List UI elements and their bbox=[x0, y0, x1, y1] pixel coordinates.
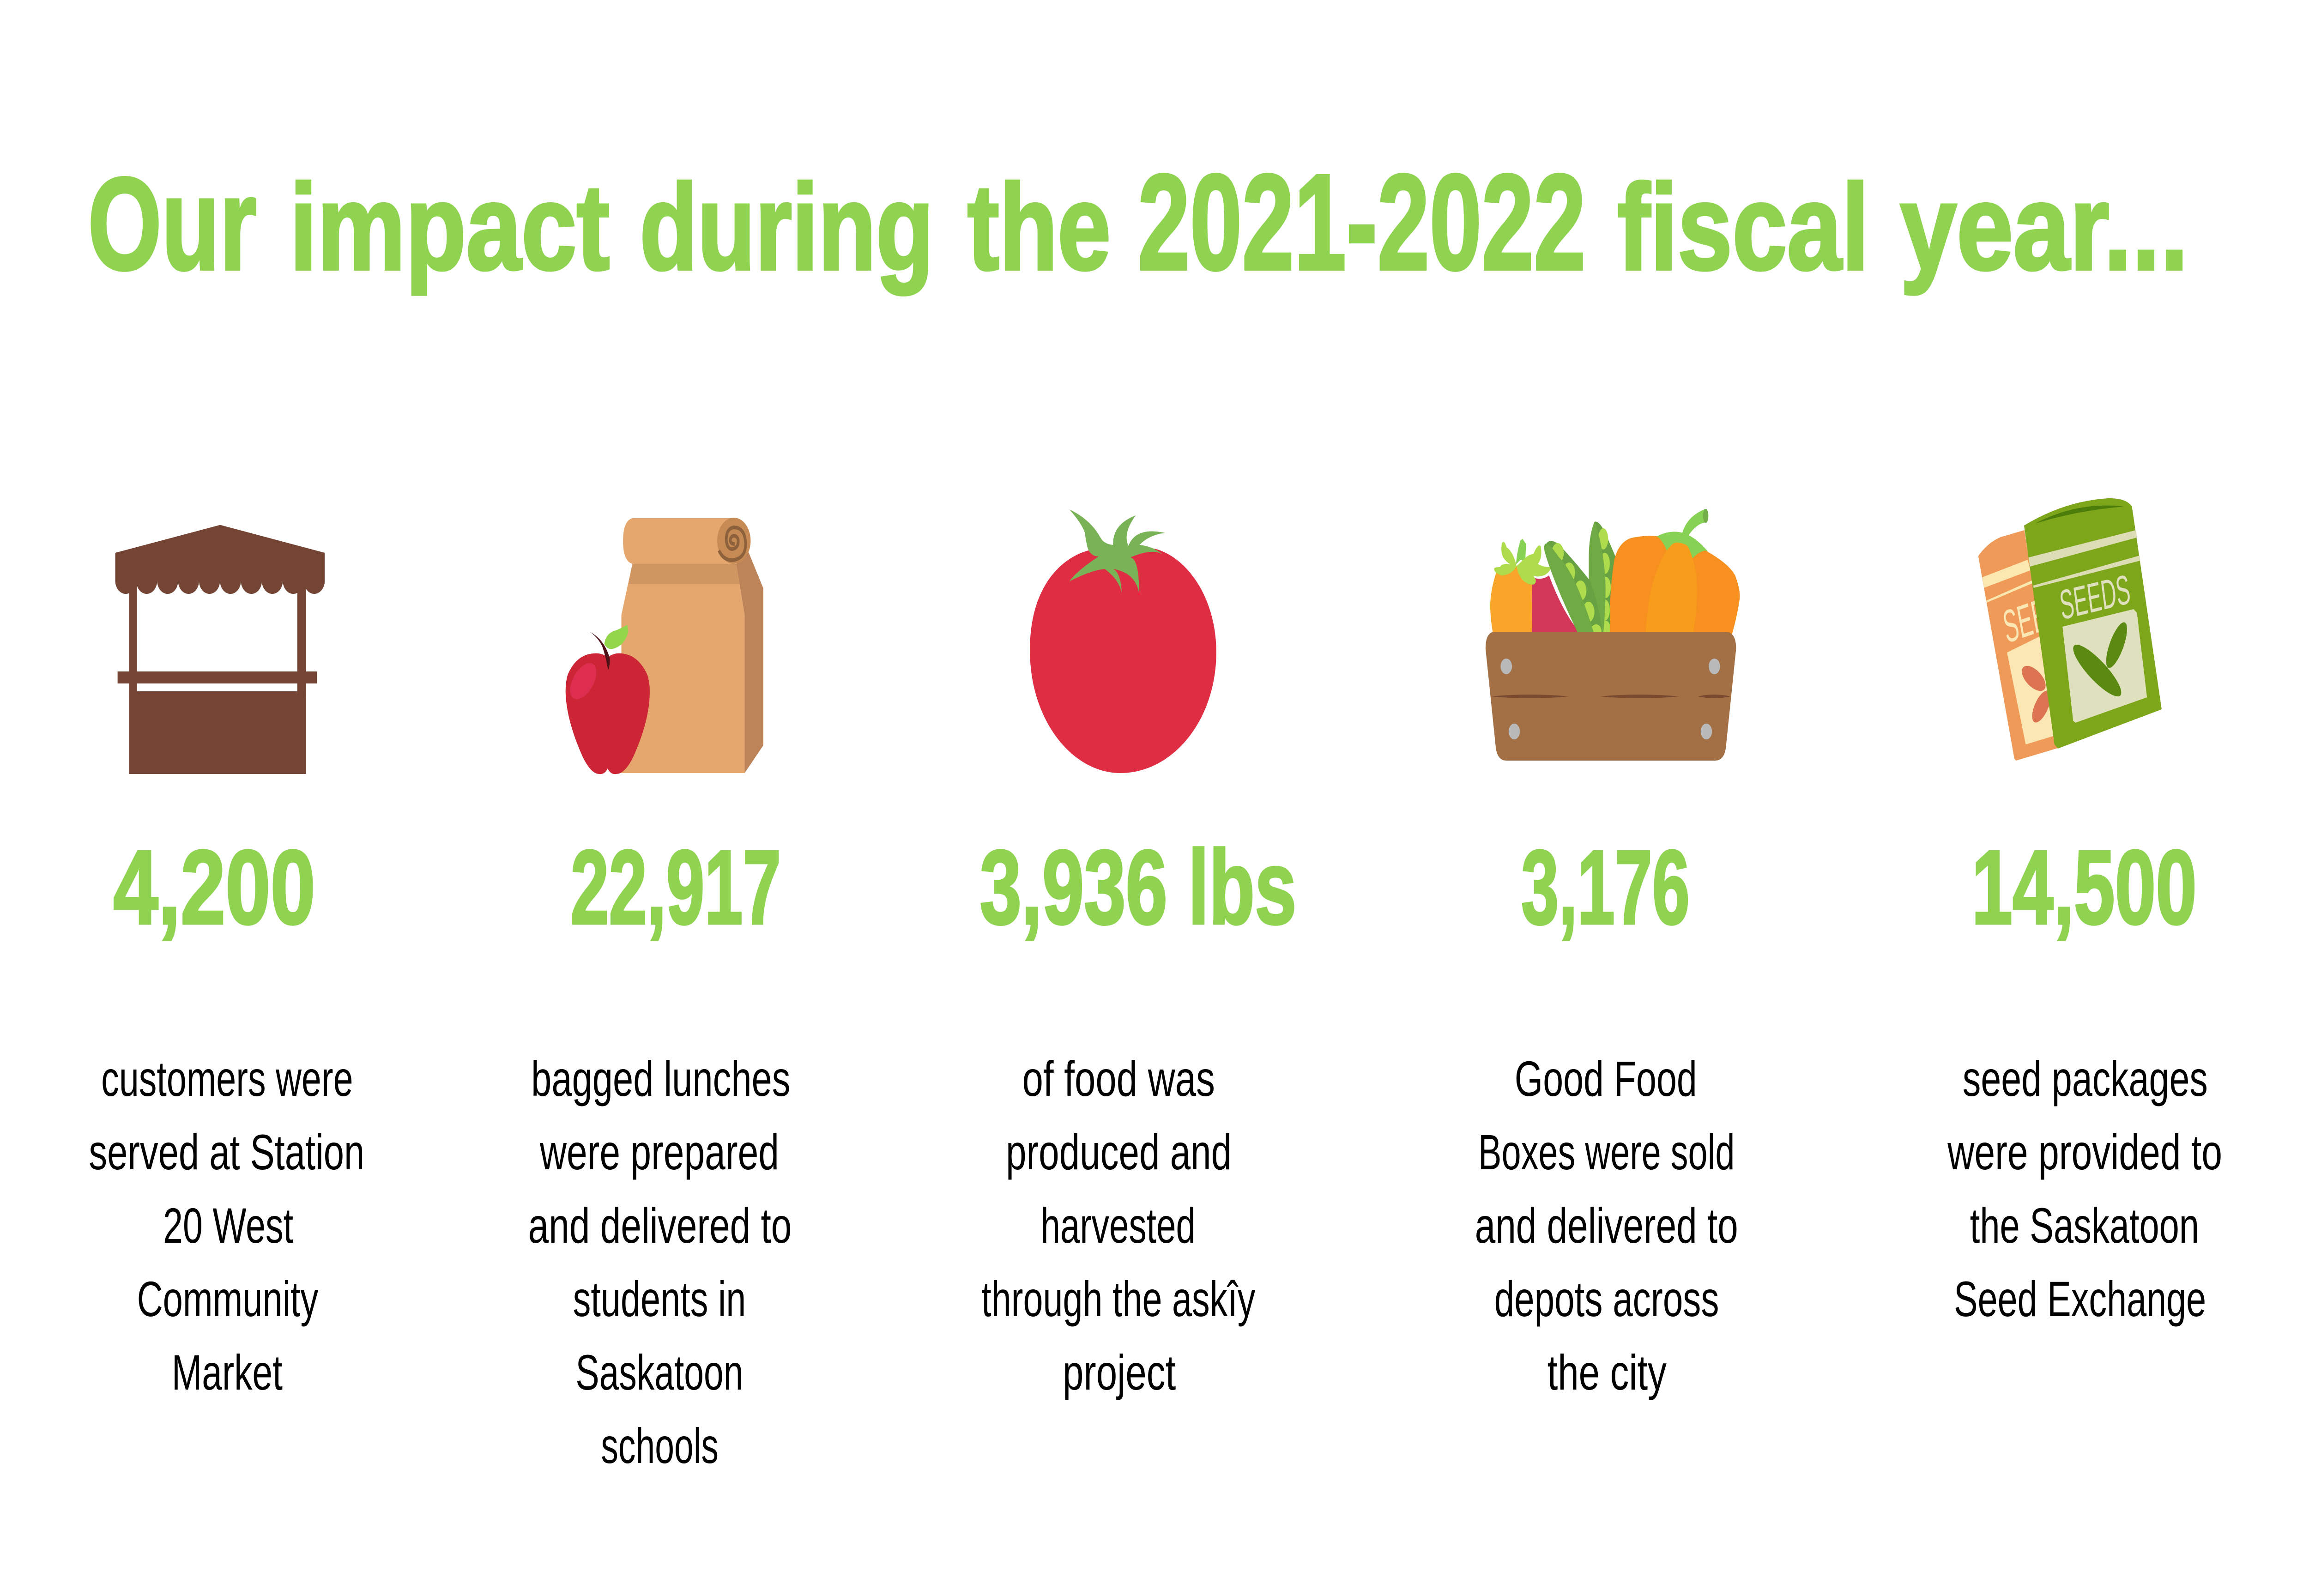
description: good food boxes: Good Food bbox=[1515, 1051, 1697, 1106]
bag side bbox=[736, 552, 763, 773]
column: seed packages bbox=[1947, 498, 2222, 1327]
description: seed packages: the Saskatoon bbox=[1970, 1198, 2199, 1253]
icon: vegetable crate bbox=[1486, 509, 1740, 761]
description: seed packages: were provided to bbox=[1947, 1124, 2222, 1180]
icon: seed packets bbox=[1978, 498, 2162, 761]
pea pod back shell bbox=[1589, 522, 1606, 635]
description: food produced: project bbox=[1063, 1345, 1176, 1400]
description: food produced: produced and bbox=[1006, 1124, 1232, 1180]
title: during bbox=[640, 159, 934, 295]
pepper stem cap bbox=[1703, 509, 1708, 523]
description: customers: served at Station bbox=[89, 1124, 364, 1180]
bag roll spiral bbox=[717, 518, 750, 564]
bag rolled top bbox=[623, 518, 734, 564]
column: bagged lunches bbox=[528, 518, 792, 1474]
description: bagged lunches bbox=[528, 1051, 792, 1474]
green packet: SEEDS bbox=[2057, 566, 2133, 629]
description: food produced: of food was bbox=[1022, 1051, 1215, 1106]
description: food produced: through the askîy bbox=[981, 1271, 1255, 1327]
description: bagged lunches: bagged lunches bbox=[531, 1051, 791, 1106]
number: customers: 4,200 bbox=[113, 829, 315, 946]
description: good food boxes: and delivered to bbox=[1475, 1198, 1738, 1253]
crate bbox=[1486, 632, 1736, 761]
description: seed packages: Seed Exchange bbox=[1954, 1271, 2206, 1327]
description: bagged lunches: students in bbox=[573, 1271, 746, 1327]
herb stalk bbox=[1516, 539, 1526, 564]
bag front bbox=[621, 564, 744, 773]
number: seed packages: 14,500 bbox=[1971, 829, 2197, 946]
description: customers: customers were bbox=[101, 1051, 353, 1106]
tomato calyx bbox=[1070, 509, 1165, 594]
herb leaves bbox=[1494, 542, 1550, 585]
description: bagged lunches: were prepared bbox=[539, 1124, 779, 1180]
title bbox=[88, 146, 2188, 298]
column: good food boxes bbox=[1475, 509, 1740, 1400]
apple body bbox=[566, 653, 650, 774]
pea pod front shell bbox=[1544, 544, 1595, 635]
pea pod front bbox=[1547, 541, 1602, 635]
icon: tomato bbox=[1030, 509, 1216, 773]
pepper stem bbox=[1682, 509, 1707, 536]
beet bbox=[1532, 575, 1582, 635]
column: market customers bbox=[89, 525, 364, 1400]
description: bagged lunches: Saskatoon bbox=[575, 1345, 743, 1400]
description: customers: Market bbox=[172, 1345, 283, 1400]
pumpkin bbox=[1610, 536, 1740, 635]
pea pod front seeds bbox=[1552, 543, 1602, 637]
title: Our bbox=[88, 150, 257, 297]
description: customers bbox=[89, 1051, 364, 1400]
bag fold band bbox=[629, 564, 740, 584]
title: the bbox=[967, 159, 1111, 295]
title: 2021-2022 bbox=[1138, 146, 1586, 298]
apple leaf bbox=[604, 625, 629, 649]
orange packet: SEE bbox=[2000, 589, 2050, 653]
description: good food boxes: depots across bbox=[1494, 1271, 1719, 1327]
description: good food boxes: the city bbox=[1547, 1345, 1667, 1400]
title: impact bbox=[290, 159, 610, 295]
title: year... bbox=[1900, 159, 2188, 295]
description: customers: 20 West bbox=[163, 1198, 293, 1253]
description: food produced bbox=[981, 1051, 1255, 1400]
description: seed packages bbox=[1947, 1051, 2222, 1327]
pepper top bbox=[1654, 532, 1708, 582]
green packet bbox=[2024, 498, 2162, 749]
carrot bbox=[1490, 566, 1532, 635]
crate bolts bbox=[1500, 659, 1720, 739]
pea pod back seeds bbox=[1598, 528, 1611, 637]
description: seed packages: seed packages bbox=[1963, 1051, 2208, 1106]
description: bagged lunches: and delivered to bbox=[528, 1198, 792, 1253]
description: customers: Community bbox=[137, 1271, 318, 1327]
apple highlight bbox=[565, 656, 601, 706]
description: good food boxes bbox=[1475, 1051, 1738, 1400]
apple stem bbox=[590, 632, 610, 670]
tomato body bbox=[1030, 545, 1216, 773]
pea pod back bbox=[1595, 522, 1615, 635]
number: bagged lunches: 22,917 bbox=[571, 829, 781, 946]
title: fiscal bbox=[1618, 159, 1869, 295]
number: good food boxes: 3,176 bbox=[1521, 829, 1690, 946]
description: bagged lunches: schools bbox=[601, 1418, 719, 1474]
icon: market stall bbox=[115, 525, 325, 774]
column: food produced bbox=[980, 509, 1296, 1400]
crate plank gap bbox=[1491, 695, 1731, 698]
number: food produced: 3,936 lbs bbox=[980, 829, 1296, 946]
icon: paper bag and apple bbox=[565, 518, 763, 774]
orange packet bbox=[1978, 530, 2058, 761]
description: good food boxes: Boxes were sold bbox=[1478, 1124, 1735, 1180]
description: food produced: harvested bbox=[1040, 1198, 1196, 1253]
